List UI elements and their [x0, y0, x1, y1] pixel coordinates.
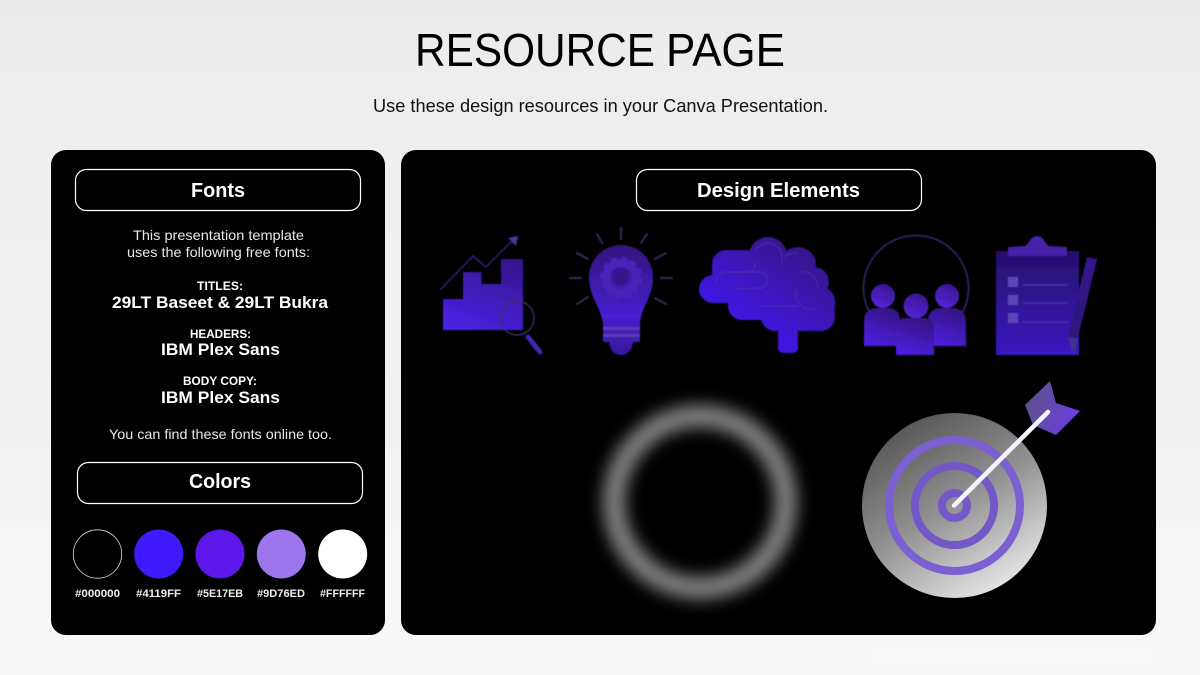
text block: titles font: 29LT Baseet & 29LT Bukra: [112, 293, 329, 312]
swatch: white: #FFFFFF: [320, 588, 365, 600]
title: PAGE: [666, 24, 785, 76]
subtitle: Use these design resources in your Canva Presentation.: [373, 96, 828, 116]
text block: headers font: HEADERS:: [190, 327, 251, 341]
text block: fonts intro: uses the following free fonts:: [127, 244, 310, 260]
text block: fonts intro: [127, 227, 310, 260]
text block: fonts note: You can find these fonts online too.: [109, 426, 332, 442]
text block: body copy font: [161, 374, 280, 407]
text block: titles font: TITLES:: [197, 279, 243, 293]
swatch: blue: [134, 530, 183, 600]
footer strip: [872, 648, 1152, 664]
swatch: black: [73, 530, 122, 600]
icon: brain: [699, 237, 835, 353]
text block: headers font: [161, 327, 280, 359]
icon: blurred ring: [614, 416, 786, 588]
text block: headers font: IBM Plex Sans: [161, 340, 280, 359]
heading: design elements: [636, 170, 922, 210]
heading: design elements: Design Elements: [697, 180, 860, 202]
icon: bar chart with magnifier: [440, 236, 540, 352]
panel: fonts and colors: [51, 150, 385, 635]
heading: fonts: Fonts: [191, 180, 245, 202]
swatch: lavender: #9D76ED: [257, 588, 305, 600]
heading: colors: Colors: [189, 471, 251, 493]
swatch: white: [318, 530, 367, 600]
text block: titles font: [112, 279, 329, 312]
text block: fonts intro: This presentation template: [133, 227, 304, 243]
title: RESOURCE: [415, 24, 655, 76]
swatch: blue: #4119FF: [136, 588, 181, 600]
panel: design elements: [401, 150, 1156, 635]
swatch: lavender: [257, 530, 306, 600]
text block: body copy font: BODY COPY:: [183, 374, 257, 388]
icon: target with arrow: [862, 381, 1080, 598]
heading: fonts: [76, 170, 360, 210]
heading: colors: [78, 462, 362, 504]
icon: light bulb with gear: [570, 228, 672, 355]
icon: clipboard and pencil: [996, 236, 1097, 355]
swatch: black: #000000: [75, 588, 120, 600]
swatch: violet: [196, 530, 244, 600]
icon: team in circle: [864, 236, 968, 355]
text block: body copy font: IBM Plex Sans: [161, 388, 280, 407]
swatch: violet: #5E17EB: [197, 588, 243, 600]
